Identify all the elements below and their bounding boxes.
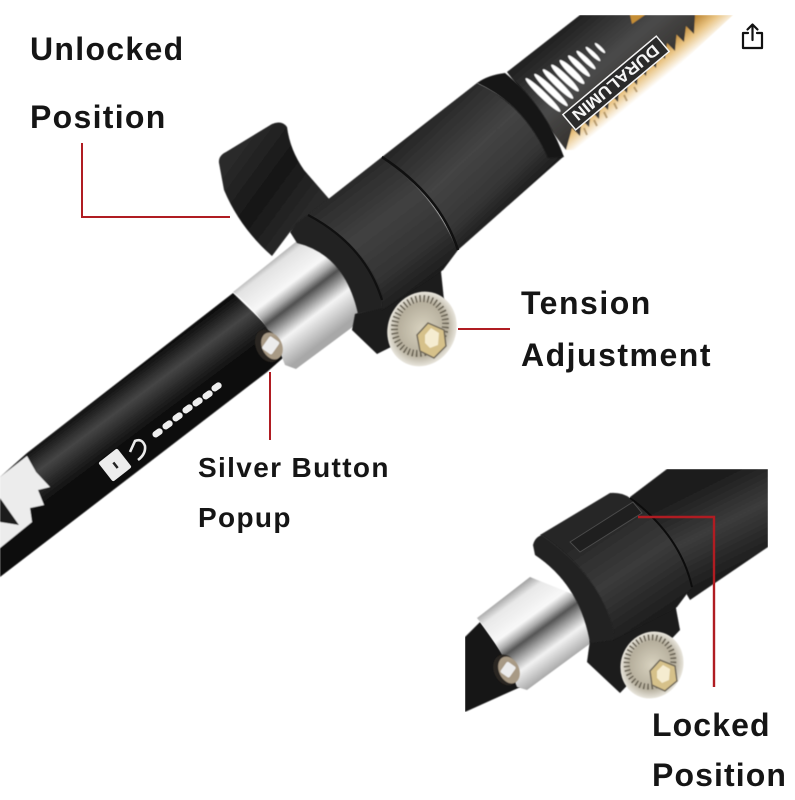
label: locked position: Locked — [652, 707, 771, 743]
icon: share — [743, 24, 762, 48]
inset upper pole — [630, 469, 768, 600]
collar end ring — [477, 73, 564, 158]
label: unlocked position: Unlocked — [30, 31, 184, 67]
position dots — [151, 381, 223, 439]
label: silver button popup: Popup — [198, 502, 292, 533]
leader line: tension adjustment — [458, 328, 510, 330]
lower pole — [0, 293, 292, 577]
collar lip — [290, 215, 382, 314]
inset clamp bracket — [587, 603, 680, 693]
tension adjustment screw — [386, 290, 457, 367]
label: tension adjustment: Adjustment — [521, 337, 712, 373]
inset tension screw — [620, 630, 684, 699]
inset silver ring — [477, 577, 595, 690]
label: locked position: Position — [652, 757, 787, 793]
label: unlocked position — [30, 31, 184, 135]
lock lever — [219, 123, 330, 256]
label: silver button popup — [198, 452, 390, 533]
upper pole section with gold graphic — [507, 15, 733, 150]
lower collar body — [308, 157, 458, 310]
inset button — [493, 654, 520, 686]
duralumin label: DURALUMIN — [568, 41, 662, 123]
inset photo: locked position — [465, 469, 768, 712]
duralumin label — [563, 36, 669, 130]
label: unlocked position: Position — [30, 99, 167, 135]
leader line: locked position — [638, 517, 714, 687]
collar seams — [308, 157, 458, 300]
open shackle — [130, 440, 145, 460]
label: silver button popup: Silver Button — [198, 452, 390, 483]
clamp bracket — [352, 262, 444, 354]
inset collar lip — [533, 535, 614, 643]
label: tension adjustment: Tension — [521, 285, 652, 321]
label: locked position — [652, 707, 787, 793]
label: tension adjustment — [521, 285, 712, 373]
leader line: unlocked position — [82, 143, 230, 217]
leader line: silver button popup — [269, 372, 271, 440]
inset collar body — [540, 493, 692, 640]
silver collar ring — [233, 241, 362, 369]
inset locked lever tab — [570, 502, 642, 552]
inset lower pole — [465, 622, 525, 712]
upper collar body — [382, 83, 563, 250]
lock symbol — [98, 448, 132, 482]
main photo: trekking pole lock in unlocked position — [0, 15, 733, 577]
inset collar seam — [630, 498, 692, 587]
silver button — [255, 330, 284, 362]
